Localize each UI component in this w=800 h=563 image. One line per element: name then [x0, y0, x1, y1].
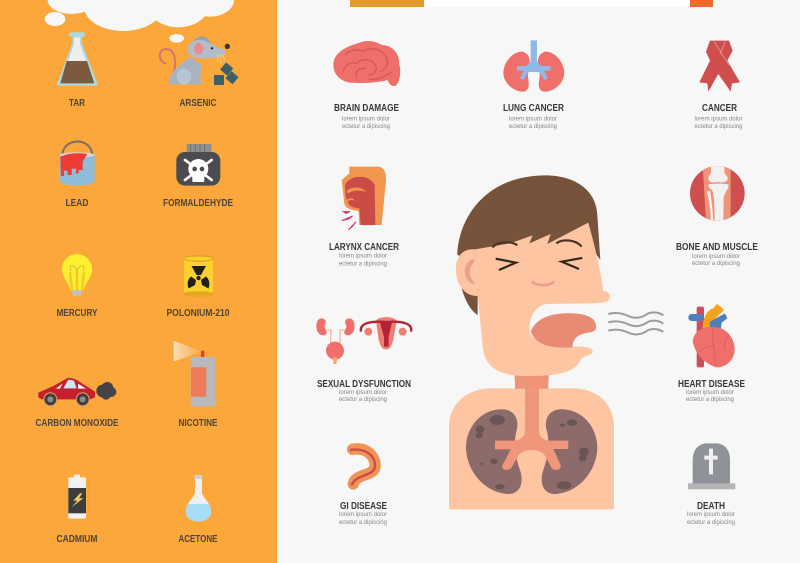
- disease: brain damage: [333, 41, 400, 130]
- chemical: lead: [60, 141, 95, 209]
- disease: brain damage: ectetur a dipiscing: [342, 124, 390, 130]
- chemical: lead: LEAD: [66, 198, 88, 209]
- disease: cancer ribbon: ectetur a dipiscing: [694, 124, 742, 130]
- chemical: polonium-210: [166, 256, 230, 319]
- disease: death gravestone: lorem ipsum dolor: [687, 512, 735, 518]
- disease: heart disease: lorem ipsum dolor: [686, 390, 734, 396]
- disease: cancer ribbon: CANCER: [702, 102, 737, 114]
- disease: larynx cancer: [329, 167, 399, 268]
- disease: bone and muscle: ectetur a dipiscing: [692, 261, 740, 267]
- disease: sexual dysfunction: SEXUAL DYSFUNCTION: [317, 378, 411, 390]
- chemical: nicotine: [174, 341, 218, 429]
- disease: gi disease: lorem ipsum dolor: [339, 512, 387, 518]
- disease: larynx cancer: ectetur a dipiscing: [339, 262, 387, 268]
- disease: death gravestone: [687, 443, 735, 526]
- chemical: cadmium: [56, 475, 98, 545]
- disease: death gravestone: ectetur a dipiscing: [687, 520, 735, 526]
- disease: bone and muscle: BONE AND MUSCLE: [676, 241, 758, 253]
- disease: lung cancer: [503, 40, 564, 130]
- disease: sexual dysfunction: ectetur a dipiscing: [339, 397, 387, 403]
- disease: bone and muscle: lorem ipsum dolor: [692, 254, 740, 260]
- panel: harmful chemicals: [0, 0, 277, 563]
- disease: heart disease: ectetur a dipiscing: [686, 397, 734, 403]
- thought cloud: [45, 0, 234, 31]
- chemical: tar: TAR: [69, 98, 86, 109]
- disease: gi disease: GI DISEASE: [340, 500, 387, 512]
- disease: brain damage: BRAIN DAMAGE: [334, 102, 399, 114]
- disease: heart disease: [678, 304, 745, 403]
- chemical: cadmium: CADMIUM: [56, 534, 98, 545]
- disease: lung cancer: LUNG CANCER: [503, 102, 564, 114]
- chemical: formaldehyde: FORMALDEHYDE: [163, 198, 233, 209]
- disease: larynx cancer: LARYNX CANCER: [329, 241, 399, 253]
- chemical: arsenic: ARSENIC: [180, 98, 216, 109]
- chemical: tar: [57, 32, 97, 109]
- chemical: polonium-210: POLONIUM-210: [166, 308, 230, 319]
- chemical: mercury: MERCURY: [56, 308, 98, 319]
- disease: sexual dysfunction: lorem ipsum dolor: [339, 390, 387, 396]
- disease: brain damage: lorem ipsum dolor: [342, 116, 390, 122]
- chemical: formaldehyde: [163, 144, 233, 209]
- disease: death gravestone: DEATH: [697, 500, 725, 512]
- disease: lung cancer: ectetur a dipiscing: [509, 124, 557, 130]
- disease: bone and muscle: [676, 165, 758, 267]
- disease: gi disease: ectetur a dipiscing: [339, 520, 387, 526]
- head: [456, 175, 663, 381]
- disease: larynx cancer: lorem ipsum dolor: [339, 254, 387, 260]
- central figure: coughing man: [449, 175, 663, 509]
- body with blackened lungs: [449, 370, 614, 509]
- breath waves: [608, 312, 663, 334]
- disease: sexual dysfunction: [316, 317, 411, 403]
- chemical: acetone: ACETONE: [178, 534, 218, 545]
- disease: lung cancer: lorem ipsum dolor: [509, 116, 557, 122]
- disease: heart disease: HEART DISEASE: [678, 378, 745, 390]
- top banner bars: [350, 0, 713, 7]
- chemical: acetone: [178, 475, 218, 545]
- disease: cancer ribbon: lorem ipsum dolor: [694, 116, 742, 122]
- disease: gi disease: [339, 449, 387, 526]
- chemical: nicotine: NICOTINE: [178, 418, 218, 429]
- chemical: mercury: [56, 254, 98, 319]
- chemical: carbon monoxide: [36, 378, 119, 429]
- disease: cancer ribbon: [694, 41, 742, 130]
- chemical: arsenic: [160, 34, 239, 109]
- chemical: carbon monoxide: CARBON MONOXIDE: [36, 418, 119, 429]
